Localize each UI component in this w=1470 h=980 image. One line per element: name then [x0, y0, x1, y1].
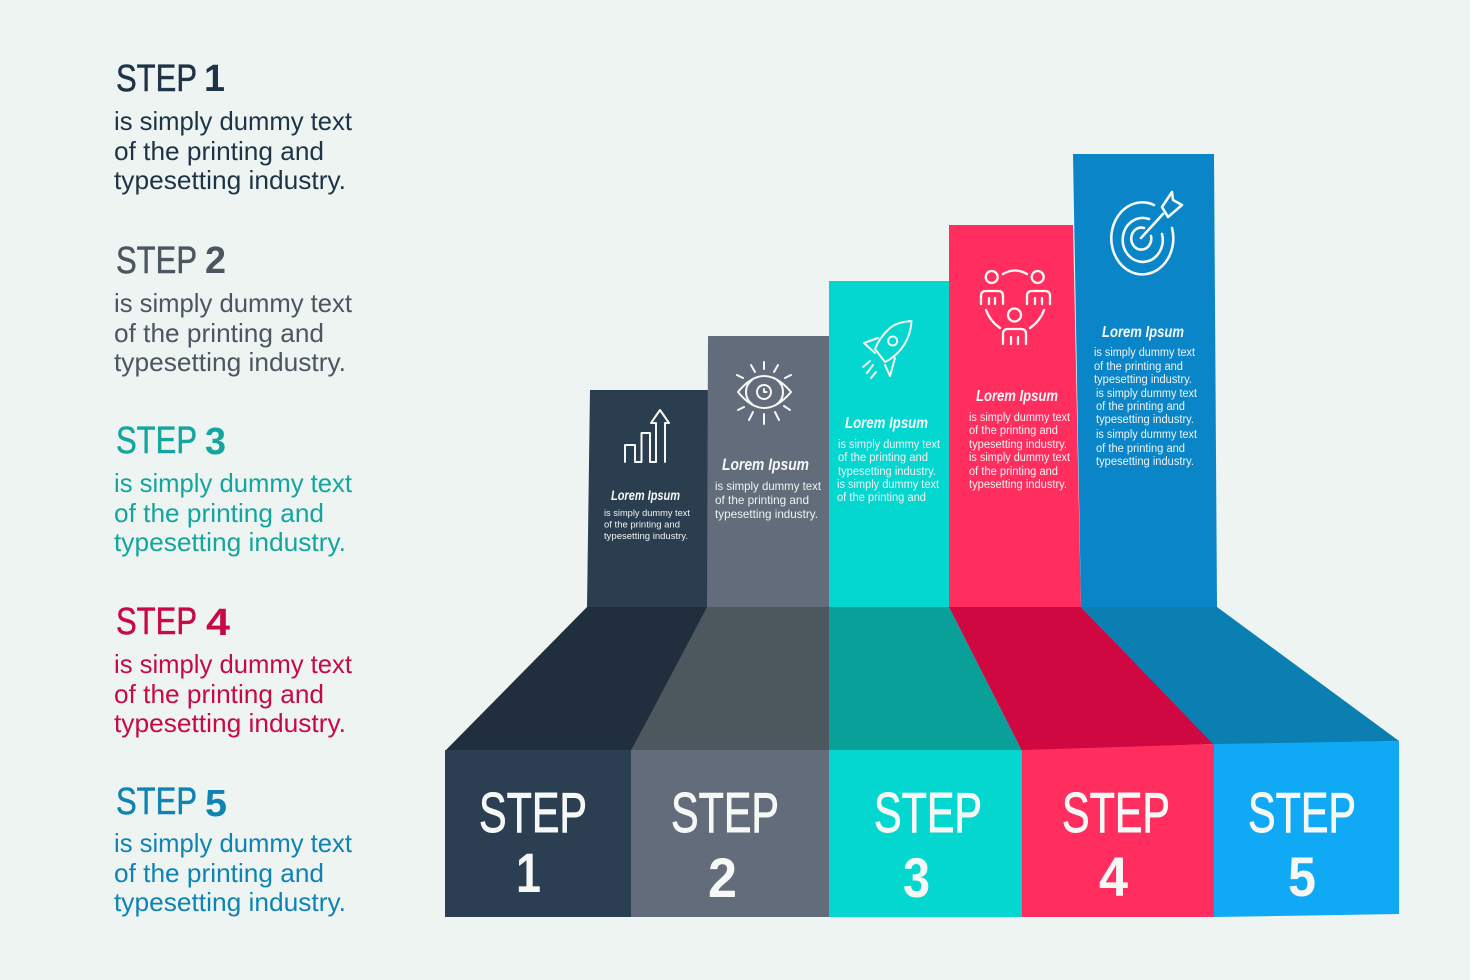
step 4 description	[114, 601, 353, 738]
step 5 upright bar	[1073, 154, 1217, 608]
step 1 bar text: of the printing and	[604, 520, 680, 530]
step 4 description: 4	[206, 602, 230, 644]
step 3 description: is simply dummy text	[114, 468, 353, 498]
step 5 bar text: is simply dummy text	[1094, 347, 1196, 359]
step 5 block label	[1248, 781, 1356, 908]
step 2 bar text: of the printing and	[715, 493, 809, 507]
step 2 description: 2	[205, 240, 226, 282]
step 5 bar text: typesetting industry.	[1096, 456, 1194, 468]
left list: step descriptions	[114, 58, 353, 917]
step 5 bar text: of the printing and	[1094, 361, 1183, 373]
step 4 bar text: Lorem Ipsum	[976, 388, 1058, 405]
step 2 front block	[631, 750, 829, 917]
step 1 block label	[479, 781, 587, 904]
step 5 bar text: typesetting industry.	[1094, 374, 1192, 386]
step 5 bar text	[1094, 324, 1198, 468]
step 1 description: 1	[204, 58, 225, 100]
step 4 bar text: is simply dummy text	[969, 452, 1071, 464]
step 4 front block	[1022, 744, 1214, 917]
step 4 bar text: is simply dummy text	[969, 412, 1071, 424]
step 2 block label: STEP	[671, 781, 779, 845]
step 4 receding floor	[949, 607, 1214, 751]
step 3 description: of the printing and	[114, 498, 324, 528]
step 4 bar text	[969, 388, 1071, 491]
step 4 bar text: of the printing and	[969, 466, 1058, 478]
step 3 bar text	[837, 415, 941, 504]
step 1 column	[445, 390, 708, 917]
step 1 bar text: is simply dummy text	[604, 508, 690, 519]
step 5 description: of the printing and	[114, 858, 324, 888]
step 3 block label	[874, 781, 982, 909]
step 3 bar text: is simply dummy text	[837, 479, 940, 491]
step 4 block label: 4	[1099, 845, 1128, 908]
step 4 bar text: of the printing and	[969, 425, 1058, 437]
step 1 block label: STEP	[479, 781, 587, 845]
step 1 front block	[445, 750, 631, 917]
step 5 description	[114, 781, 353, 917]
step 5 block label: STEP	[1248, 781, 1356, 845]
step 2 block label: 2	[708, 846, 737, 909]
step 3 receding floor	[829, 607, 1022, 751]
step 3 bar text: of the printing and	[838, 452, 928, 464]
step 2 block label	[671, 781, 779, 909]
icon: team of three	[981, 270, 1050, 344]
step 2 bar text: is simply dummy text	[715, 479, 822, 493]
icon: rising bars with arrow	[625, 410, 669, 462]
step 4 block label	[1062, 781, 1170, 908]
step 5 receding floor	[1081, 607, 1399, 745]
step 5 bar text: Lorem Ipsum	[1102, 324, 1184, 341]
step 4 block label: STEP	[1062, 781, 1170, 845]
step 4 description: STEP	[116, 601, 197, 643]
step 2 bar text: Lorem Ipsum	[722, 455, 809, 474]
step 2 column	[631, 336, 829, 917]
step 4 bar text: typesetting industry.	[969, 439, 1067, 451]
step 1 receding floor	[445, 607, 708, 751]
step 1 block label: 1	[516, 841, 541, 904]
step 2 description: typesetting industry.	[114, 347, 346, 377]
icon: rocket	[863, 321, 912, 378]
step 5 block label: 5	[1288, 845, 1316, 908]
step 1 upright bar	[587, 390, 708, 608]
step 3 front block	[829, 750, 1022, 917]
icon: target with arrow	[1111, 192, 1182, 274]
step 1 bar text: typesetting industry.	[604, 531, 688, 542]
step 3 description: STEP	[116, 420, 197, 462]
step 3 column	[829, 281, 1022, 917]
step 5 description: is simply dummy text	[114, 828, 353, 858]
step 4 bar text: typesetting industry.	[969, 479, 1067, 491]
step 3 bar text: of the printing and	[837, 492, 926, 504]
step 5 description: 5	[205, 783, 227, 825]
step 5 front block	[1214, 741, 1399, 917]
icon: eye	[737, 362, 791, 424]
step 5 description: typesetting industry.	[114, 887, 346, 917]
step 5 bar text: is simply dummy text	[1096, 429, 1198, 441]
step 3 bar text: Lorem Ipsum	[845, 415, 928, 432]
step 1 description	[114, 58, 353, 195]
step 1 bar text: Lorem Ipsum	[611, 487, 680, 503]
step 2 description: of the printing and	[114, 318, 324, 348]
step 1 description: of the printing and	[114, 136, 324, 166]
step 5 column	[1073, 154, 1399, 917]
step 5 bar text: typesetting industry.	[1096, 414, 1194, 426]
step 2 upright bar	[707, 336, 829, 608]
step 3 upright bar	[829, 281, 949, 608]
step 5 bar text: is simply dummy text	[1096, 388, 1198, 400]
step 5 bar text: of the printing and	[1096, 401, 1185, 413]
step 2 receding floor	[631, 607, 829, 751]
step 4 description: is simply dummy text	[114, 649, 353, 679]
step 2 description: STEP	[116, 240, 197, 282]
step 3 description	[114, 420, 353, 557]
step 5 description: STEP	[116, 781, 197, 823]
step 4 upright bar	[949, 225, 1081, 608]
step 5 bar text: of the printing and	[1096, 443, 1185, 455]
step 4 description: typesetting industry.	[114, 708, 346, 738]
step 1 bar text	[604, 487, 690, 542]
step 2 bar text: typesetting industry.	[715, 507, 818, 521]
step 3 block label: 3	[903, 846, 930, 909]
step 2 bar text	[715, 455, 822, 521]
step 4 column	[949, 225, 1214, 917]
step 2 description: is simply dummy text	[114, 288, 353, 318]
step 3 bar text: typesetting industry.	[838, 466, 936, 478]
step 3 description: typesetting industry.	[114, 527, 346, 557]
step 3 description: 3	[205, 421, 226, 463]
step 2 description	[114, 240, 353, 377]
step 1 description: STEP	[116, 58, 197, 100]
step 4 description: of the printing and	[114, 679, 324, 709]
step 1 description: typesetting industry.	[114, 165, 346, 195]
step 3 bar text: is simply dummy text	[838, 439, 941, 451]
step 1 description: is simply dummy text	[114, 106, 353, 136]
step 3 block label: STEP	[874, 781, 982, 845]
